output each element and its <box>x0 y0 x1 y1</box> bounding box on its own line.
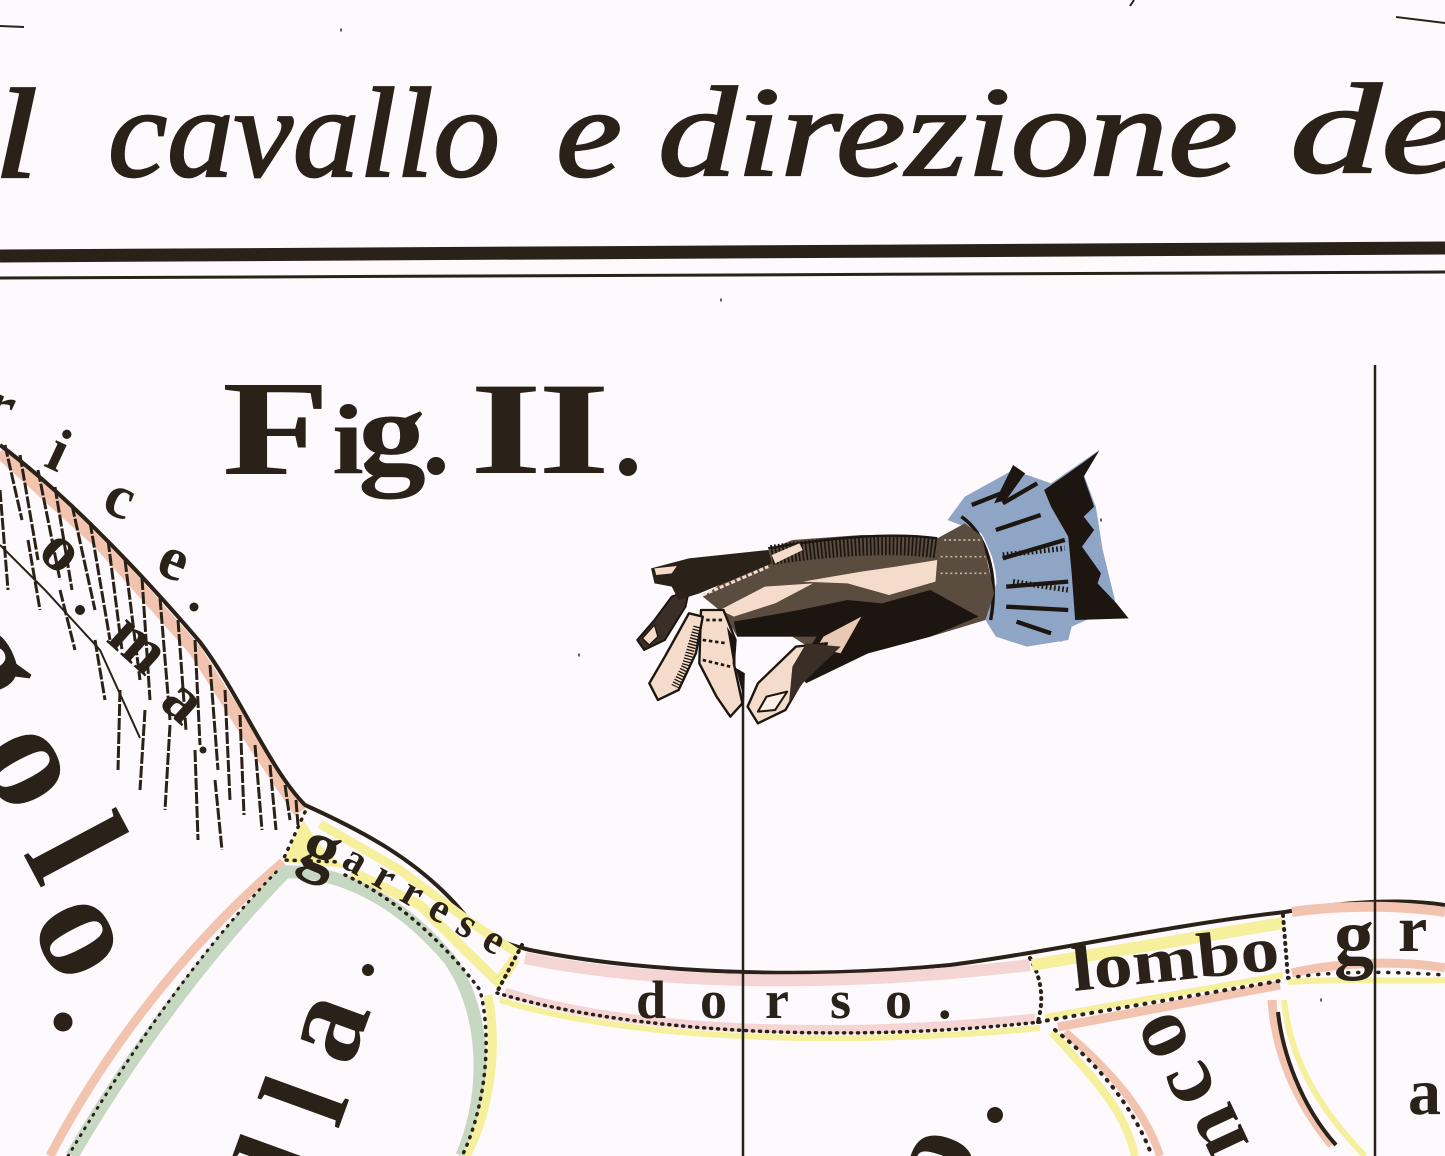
label: chioma <box>26 512 221 754</box>
figure heading: I <box>470 355 542 502</box>
title: e <box>556 62 622 204</box>
title <box>0 58 1445 205</box>
label: garrese: g <box>291 803 354 890</box>
hatching: wrist <box>941 540 989 573</box>
figure heading: g <box>358 366 426 500</box>
panel: horse outline <box>0 445 1445 1156</box>
lombo band <box>1032 923 1283 965</box>
hand silhouette mid tone <box>703 523 994 680</box>
cuff <box>948 450 1117 647</box>
shoulder outline colours <box>50 862 283 1156</box>
label: chioma: m <box>95 597 185 688</box>
thumb <box>748 643 827 723</box>
index finger <box>699 610 742 717</box>
label: spalla <box>209 964 398 1156</box>
groppa band <box>1292 907 1445 912</box>
mane hairs <box>0 445 298 850</box>
label: dorso: dorso. <box>636 970 952 1030</box>
label: mane upper text: i <box>37 416 81 485</box>
garrese band <box>283 820 345 868</box>
little finger <box>651 550 772 600</box>
hatching: back of hand <box>772 545 937 555</box>
figure heading: i <box>332 384 364 495</box>
label: collo <box>0 588 181 1032</box>
label: lombo: lombo <box>1068 913 1282 1005</box>
neck line <box>0 445 1445 973</box>
icon: hand holding plumb line <box>637 450 1129 723</box>
label: spalla: a <box>247 972 398 1078</box>
underside shadow <box>734 590 979 683</box>
title: de <box>1290 58 1445 200</box>
label: spalla: l <box>234 1060 376 1140</box>
figure heading <box>222 354 637 504</box>
label: groppa <box>1334 893 1427 981</box>
label: mane upper text: c <box>95 460 146 534</box>
mane inner line <box>0 545 140 738</box>
label: groppa: r <box>1398 893 1427 966</box>
dorso band <box>525 958 1030 980</box>
vertical line: plumb line held by hand <box>742 675 744 1156</box>
label: fianco <box>1103 998 1268 1156</box>
label: groppa: g <box>1334 893 1374 981</box>
label: partial letter right: a <box>1408 1056 1441 1129</box>
skin highlight: back of hand <box>803 560 937 595</box>
label: garrese <box>291 803 514 965</box>
label: collo: o <box>0 860 181 1004</box>
figure heading: I <box>538 355 610 502</box>
label: fianco: o <box>1103 998 1210 1079</box>
skin highlight: knuckles <box>720 583 813 617</box>
double rule under title <box>0 248 1445 278</box>
flank curves <box>1065 1032 1160 1156</box>
title: direzione <box>658 61 1238 203</box>
label: fianco: c <box>1132 1049 1236 1125</box>
vertical line: right plumb line <box>1374 365 1376 1156</box>
label: garrese: arrese <box>335 835 514 965</box>
middle finger <box>649 613 703 700</box>
title: cavallo <box>108 62 500 204</box>
figure heading: F <box>222 354 330 504</box>
ring finger <box>637 590 689 650</box>
mane colour band <box>0 452 300 812</box>
label: chioma: o <box>26 512 99 588</box>
label: mane upper text: e <box>149 522 200 596</box>
label: chioma: a <box>148 662 221 738</box>
label: mane upper text <box>0 368 200 612</box>
